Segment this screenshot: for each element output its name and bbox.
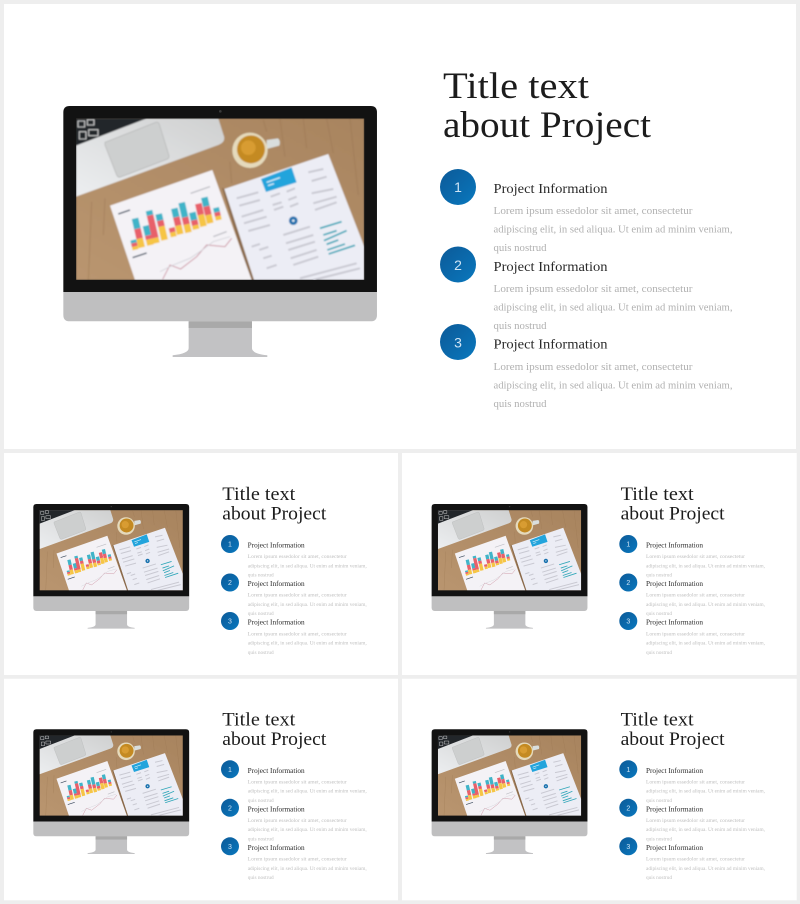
items: Project Information <box>646 580 704 588</box>
items: Project Information <box>646 618 704 626</box>
items: 1 <box>626 542 630 548</box>
item 1: quis nostrud <box>494 242 547 254</box>
items: Lorem ipsum essedolor sit amet, consectetur <box>646 631 745 637</box>
panel: small slide bottom right <box>402 679 797 900</box>
title: Title text <box>222 485 296 505</box>
items: Lorem ipsum essedolor sit amet, consectetur <box>248 818 347 824</box>
items: Lorem ipsum essedolor sit amet, consectetur <box>248 592 347 598</box>
items: Lorem ipsum essedolor sit amet, consectetur <box>248 554 347 560</box>
items: adipiscing elit, in sed aliqua. Ut enim ad minim veniam, <box>646 602 766 608</box>
items: adipiscing elit, in sed aliqua. Ut enim ad minim veniam, <box>646 789 766 795</box>
title: Title text <box>222 710 296 730</box>
items: 1 <box>228 767 232 774</box>
items: Project Information <box>248 580 305 588</box>
panel: small slide top left <box>4 453 398 675</box>
icon: desktop monitor <box>432 729 587 854</box>
item 1: Project Information <box>494 182 608 197</box>
items: 2 <box>228 805 232 812</box>
icon: desktop monitor <box>33 729 189 854</box>
item 1 <box>440 169 733 254</box>
items <box>221 535 367 656</box>
title: Title text <box>621 485 695 505</box>
items: quis nostrud <box>646 875 672 881</box>
items: Project Information <box>248 805 305 813</box>
items: adipiscing elit, in sed aliqua. Ut enim ad minim veniam, <box>248 602 367 608</box>
item 2: Project Information <box>494 260 608 275</box>
items: Project Information <box>646 542 704 550</box>
items: adipiscing elit, in sed aliqua. Ut enim ad minim veniam, <box>248 640 367 646</box>
icon: desktop monitor with report photo <box>63 106 377 357</box>
item 3 <box>440 324 733 410</box>
item 2: quis nostrud <box>494 320 547 332</box>
items <box>619 535 766 656</box>
item 1: Lorem ipsum essedolor sit amet, consectetur <box>494 205 693 217</box>
items: adipiscing elit, in sed aliqua. Ut enim ad minim veniam, <box>248 563 367 569</box>
item 3: Lorem ipsum essedolor sit amet, consectetur <box>494 361 693 373</box>
title: Title text <box>443 66 590 107</box>
items: adipiscing elit, in sed aliqua. Ut enim ad minim veniam, <box>646 827 766 833</box>
items: quis nostrud <box>646 572 672 578</box>
items: quis nostrud <box>248 650 274 656</box>
item 2: adipiscing elit, in sed aliqua. Ut enim ad minim veniam, <box>494 302 733 314</box>
items: Lorem ipsum essedolor sit amet, consectetur <box>646 818 745 824</box>
panel: small slide bottom left <box>4 679 398 900</box>
items: 2 <box>228 580 232 587</box>
panel: large slide <box>4 4 796 449</box>
items: 3 <box>228 618 232 626</box>
title: about Project <box>222 504 327 524</box>
items: 2 <box>626 580 630 587</box>
items: Lorem ipsum essedolor sit amet, consectetur <box>646 779 745 785</box>
items: quis nostrud <box>646 798 672 804</box>
items: Project Information <box>646 844 704 852</box>
items: 3 <box>626 618 630 626</box>
item 3: Project Information <box>494 338 608 352</box>
items: Lorem ipsum essedolor sit amet, consectetur <box>646 857 745 863</box>
items: adipiscing elit, in sed aliqua. Ut enim ad minim veniam, <box>248 827 367 833</box>
icon: desktop monitor <box>33 504 189 629</box>
items: adipiscing elit, in sed aliqua. Ut enim ad minim veniam, <box>646 866 766 872</box>
title: about Project <box>443 105 652 146</box>
item 3: adipiscing elit, in sed aliqua. Ut enim ad minim veniam, <box>494 380 733 392</box>
items: Lorem ipsum essedolor sit amet, consectetur <box>248 779 347 785</box>
items: quis nostrud <box>646 836 672 842</box>
items: Project Information <box>248 844 305 852</box>
title: about Project <box>222 730 327 750</box>
item 1: 1 <box>454 179 462 195</box>
item 1: adipiscing elit, in sed aliqua. Ut enim ad minim veniam, <box>494 224 733 236</box>
items: Lorem ipsum essedolor sit amet, consectetur <box>646 592 745 598</box>
items: quis nostrud <box>646 650 672 656</box>
items: 1 <box>626 767 630 774</box>
items: adipiscing elit, in sed aliqua. Ut enim ad minim veniam, <box>248 866 367 872</box>
items: 2 <box>626 805 630 812</box>
items: 3 <box>228 844 232 851</box>
items: 1 <box>228 542 232 548</box>
item 3: quis nostrud <box>494 398 547 410</box>
items: quis nostrud <box>248 572 274 578</box>
items <box>619 760 766 881</box>
items: Lorem ipsum essedolor sit amet, consectetur <box>248 857 347 863</box>
items: quis nostrud <box>248 611 274 617</box>
items: adipiscing elit, in sed aliqua. Ut enim ad minim veniam, <box>646 563 766 569</box>
title: about Project <box>621 730 725 750</box>
title: Title text <box>621 710 695 730</box>
items: 3 <box>626 844 630 851</box>
items: Project Information <box>248 767 305 775</box>
items: Lorem ipsum essedolor sit amet, consectetur <box>248 631 347 637</box>
items: adipiscing elit, in sed aliqua. Ut enim ad minim veniam, <box>646 640 766 646</box>
items: Lorem ipsum essedolor sit amet, consectetur <box>646 554 745 560</box>
title: about Project <box>621 504 725 524</box>
items: Project Information <box>248 618 305 626</box>
item 3: 3 <box>454 334 462 350</box>
items: Project Information <box>646 767 704 775</box>
items: Project Information <box>646 805 704 813</box>
item 2: 2 <box>454 257 462 273</box>
item 2 <box>440 246 733 332</box>
items: quis nostrud <box>248 836 274 842</box>
items: quis nostrud <box>248 798 274 804</box>
items: quis nostrud <box>646 611 672 617</box>
icon: desktop monitor <box>432 504 587 629</box>
items: Project Information <box>248 542 305 550</box>
item 2: Lorem ipsum essedolor sit amet, consectetur <box>494 283 693 295</box>
items: adipiscing elit, in sed aliqua. Ut enim ad minim veniam, <box>248 789 367 795</box>
items: quis nostrud <box>248 875 274 881</box>
items <box>221 760 367 881</box>
panel: small slide top right <box>402 453 797 675</box>
